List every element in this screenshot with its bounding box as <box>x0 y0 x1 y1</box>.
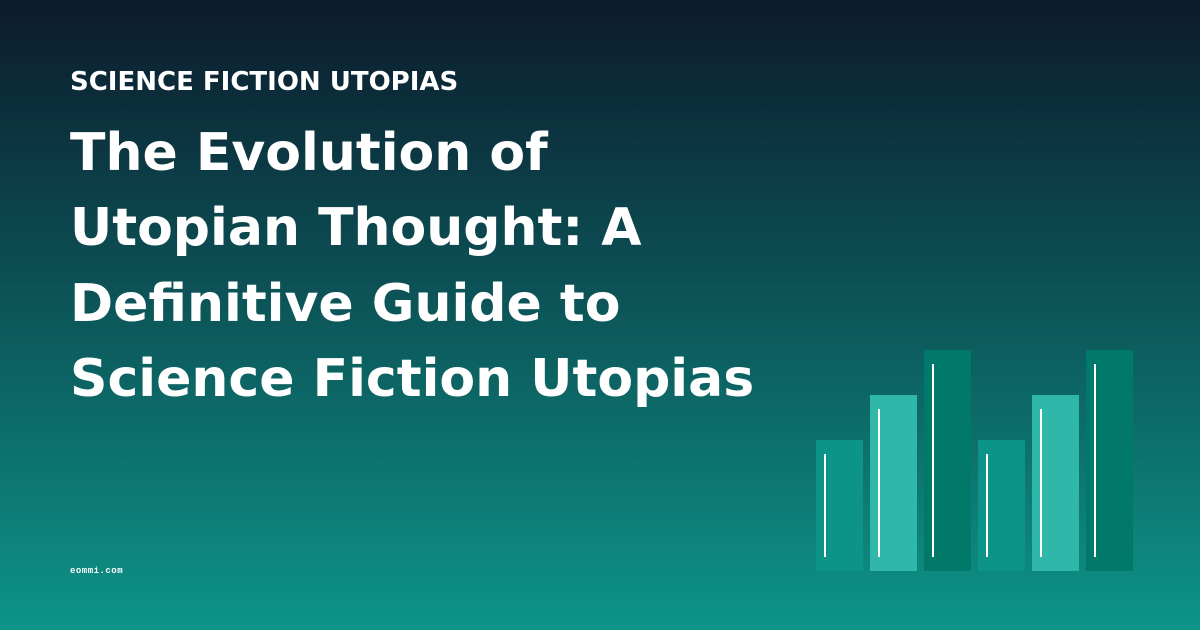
bar 2 <box>870 395 917 571</box>
title: Science Fiction Utopias <box>70 349 754 409</box>
bar 3 <box>924 350 971 571</box>
bar 6 <box>1086 350 1133 571</box>
title <box>70 123 754 409</box>
bar 4 <box>978 440 1025 571</box>
bar 1 <box>816 440 863 571</box>
title: The Evolution of <box>70 123 548 183</box>
eyebrow heading: SCIENCE FICTION UTOPIAS <box>70 67 458 97</box>
bar 5 <box>1032 395 1079 571</box>
footer site name: eommi.com <box>70 566 123 576</box>
title: Utopian Thought: A <box>70 198 642 258</box>
title: Definitive Guide to <box>70 274 620 334</box>
